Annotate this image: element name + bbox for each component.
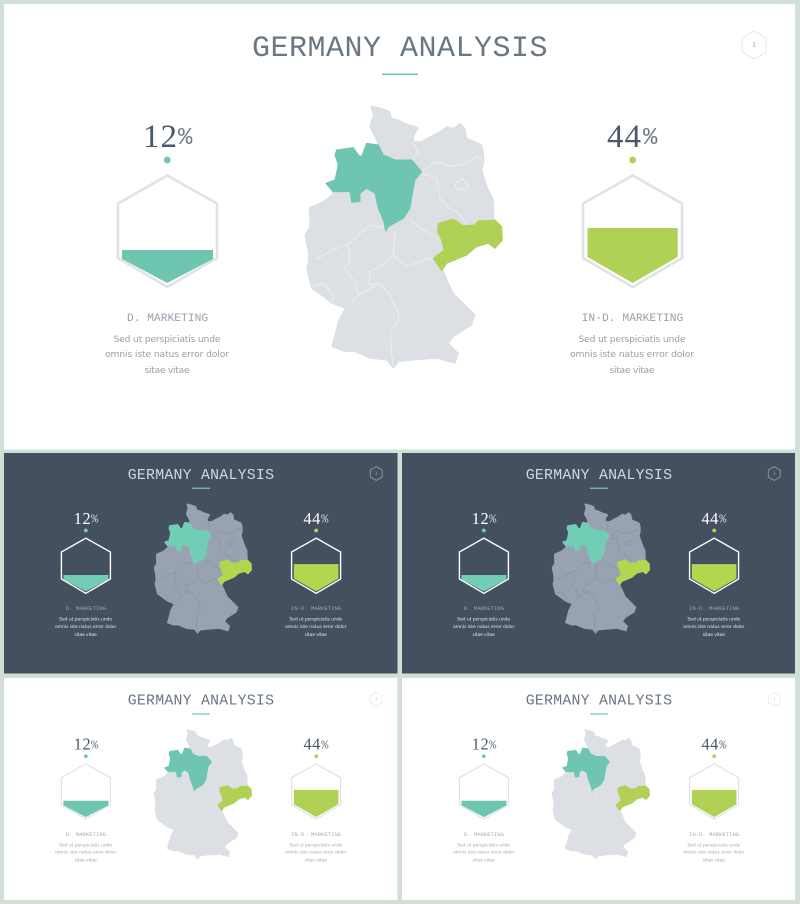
region: Lower Saxony [562,748,610,791]
right description [683,842,745,864]
right hexagon gauge [583,176,682,287]
title underline [590,713,608,715]
left dot [482,529,486,532]
title: GERMANY ANALYSIS [128,694,274,710]
right label: IN-D. MARKETING [291,605,341,612]
region: Saxony [217,785,252,811]
right metric value: % [321,513,329,527]
panel: light slide bottom right [402,678,795,900]
left description: omnis iste natus error dolor [453,624,514,630]
right description: omnis iste natus error dolor [683,850,745,856]
left description: omnis iste natus error dolor [453,850,514,856]
right dot [314,529,318,532]
left metric value [74,735,99,754]
right dot [314,754,318,758]
right metric value [701,509,727,528]
left hexagon gauge [459,538,508,593]
left metric value [74,509,99,528]
panel: dark slide right [402,453,795,674]
left metric value: % [178,125,193,152]
left description [105,334,229,376]
title: GERMANY ANALYSIS [128,468,274,484]
left metric value: % [91,513,99,527]
region: Lower Saxony [164,522,212,566]
left dot [482,754,486,758]
left description [55,842,116,864]
left description: sitae vitae [144,365,190,376]
right metric value: 44 [701,735,719,754]
left description: Sed ut perspiciatis unde [114,334,221,345]
left description: omnis iste natus error dolor [105,349,229,360]
map of Germany [552,504,650,634]
page number badge [370,467,382,480]
right description: Sed ut perspiciatis unde [687,617,741,623]
panel: dark slide left [4,453,398,674]
right description: sitae vitae [305,858,327,864]
right hexagon gauge [292,764,341,819]
left description: sitae vitae [75,858,97,864]
page number badge [768,692,780,706]
right dot [629,157,636,163]
title underline [192,713,210,715]
right description: sitae vitae [703,632,725,638]
right description: sitae vitae [305,632,327,638]
right dot [712,529,716,532]
right description: Sed ut perspiciatis unde [578,334,686,345]
left description [55,617,116,638]
region: Lower Saxony [164,748,212,791]
left metric value: 12 [472,509,489,528]
right metric value: % [321,738,329,752]
left hexagon gauge [118,176,217,287]
left description: Sed ut perspiciatis unde [59,617,112,623]
left description: Sed ut perspiciatis unde [59,842,112,848]
left metric value [472,735,497,754]
map of Germany [154,504,252,634]
left metric value: % [489,738,497,752]
right description: omnis iste natus error dolor [683,624,745,630]
panel: light slide bottom left [4,678,398,900]
right description [683,617,745,638]
left label: D. MARKETING [127,313,208,325]
page number badge [742,31,766,59]
left description: omnis iste natus error dolor [55,624,116,630]
title underline [590,488,608,489]
left dot [84,529,88,532]
left metric value: 12 [472,735,489,754]
left dot [84,754,88,758]
right description: Sed ut perspiciatis unde [289,617,343,623]
left description: omnis iste natus error dolor [55,850,116,856]
right description [285,842,347,864]
page number badge [768,467,780,480]
left label: D. MARKETING [66,831,106,838]
right dot [712,754,716,758]
right metric value [303,509,329,528]
left metric value: 12 [74,509,91,528]
right description: omnis iste natus error dolor [285,624,347,630]
right label: IN-D. MARKETING [582,313,684,325]
left label: D. MARKETING [464,605,504,612]
map of Germany [552,729,650,859]
left description: sitae vitae [473,858,495,864]
page number badge: 1 [752,40,756,49]
region: Saxony [615,785,650,811]
page number badge [370,692,382,706]
right description: omnis iste natus error dolor [285,850,347,856]
left metric value: % [489,513,497,527]
map of Germany [154,729,252,859]
right label: IN-D. MARKETING [689,831,739,838]
region: Lower Saxony [562,522,610,566]
left label: D. MARKETING [464,831,504,838]
left metric value: 12 [74,735,91,754]
panel: main light slide [4,4,795,450]
right hexagon gauge [690,764,739,819]
region: Lower Saxony [326,143,422,231]
left metric value [472,509,497,528]
left description: Sed ut perspiciatis unde [457,617,510,623]
page number badge: 2 [375,471,377,476]
page number badge: 3 [773,471,775,476]
right description [285,617,347,638]
left hexagon gauge [61,764,110,819]
left description: sitae vitae [473,632,495,638]
right description: sitae vitae [703,858,725,864]
title: GERMANY ANALYSIS [526,468,672,484]
right metric value: 44 [303,509,321,528]
right hexagon gauge [690,538,739,593]
right metric value: % [643,125,658,152]
map of Germany [305,106,502,368]
title: GERMANY ANALYSIS [252,32,548,66]
left hexagon gauge [459,764,508,819]
right metric value [701,735,727,754]
region: Saxony [217,560,252,585]
left description: sitae vitae [75,632,97,638]
right metric value [607,119,658,155]
right description: sitae vitae [610,365,655,376]
right label: IN-D. MARKETING [689,605,739,612]
region: Saxony [433,219,502,271]
right metric value: 44 [607,119,642,155]
left description: Sed ut perspiciatis unde [457,842,510,848]
right metric value: % [719,513,727,527]
right metric value: 44 [701,509,719,528]
right description: Sed ut perspiciatis unde [289,842,343,848]
right metric value: 44 [303,735,321,754]
right hexagon gauge [292,538,341,593]
left description [453,617,514,638]
title: GERMANY ANALYSIS [526,694,672,710]
right description: Sed ut perspiciatis unde [687,842,741,848]
right description: omnis iste natus error dolor [570,349,694,360]
right metric value: % [719,738,727,752]
page number badge: 4 [375,696,377,701]
left description [453,842,514,864]
region: Saxony [615,560,650,585]
left dot [164,157,171,163]
title underline [382,74,418,75]
page number badge: 1 [773,696,775,701]
right description [570,334,694,376]
right label: IN-D. MARKETING [291,831,341,838]
title underline [192,488,210,489]
right metric value [303,735,329,754]
left metric value: % [91,738,99,752]
left label: D. MARKETING [66,605,106,612]
left hexagon gauge [61,538,110,593]
left metric value: 12 [143,119,178,155]
